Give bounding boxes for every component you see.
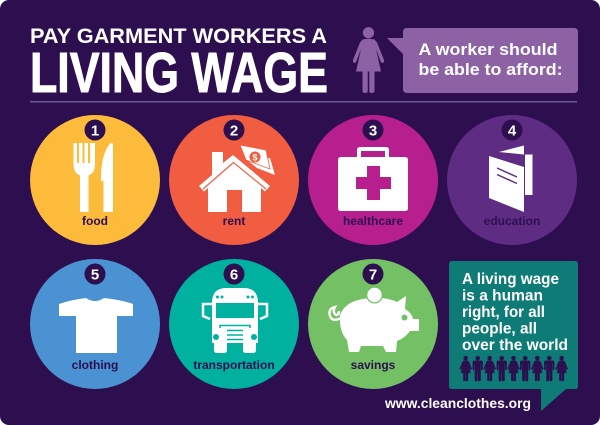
icon: first aid case: [338, 147, 408, 211]
item 6: transportation: 6: [230, 266, 238, 284]
speech bubble: a worker should be able to afford: [387, 28, 578, 93]
item 2: rent: rent: [223, 214, 245, 228]
item 4: education: [447, 115, 577, 245]
item 5: clothing: clothing: [72, 358, 118, 372]
icon: piggy bank with coin: [329, 286, 419, 352]
icon: open booklet: [489, 146, 532, 212]
icon: woman worker: [353, 27, 384, 93]
callout: a living wage is a human right: people, all: [462, 320, 537, 338]
title: [30, 25, 328, 105]
website url: www.cleanclothes.org: [384, 395, 531, 411]
item 7: savings: [308, 259, 438, 389]
icon: bus: [203, 288, 267, 353]
title: PAY GARMENT WORKERS A: [30, 25, 327, 48]
item 2: rent: [169, 115, 299, 245]
callout: a living wage is a human right: right, for all: [462, 304, 545, 321]
callout: a living wage is a human right: [449, 261, 578, 411]
icon: t-shirt: [59, 298, 133, 353]
item 5: clothing: [30, 259, 160, 389]
item 4: education: 4: [508, 122, 517, 140]
item 6: transportation: [169, 259, 299, 389]
icon row: nine people: [460, 356, 568, 381]
item 7: savings: 7: [369, 266, 377, 284]
item 3: healthcare: 3: [369, 122, 377, 140]
callout: a living wage is a human right: is a human: [462, 288, 543, 304]
speech bubble: a worker should be able to afford: be able to afford:: [418, 60, 562, 79]
item 6: transportation: transportation: [193, 358, 275, 372]
item 5: clothing: 5: [91, 266, 99, 284]
item 3: healthcare: healthcare: [343, 214, 403, 228]
item 1: food: food: [82, 214, 108, 228]
speech bubble: a worker should be able to afford: A worker should: [418, 40, 558, 59]
item 1: food: 1: [91, 122, 99, 140]
icon: house with money: $: [252, 152, 258, 162]
icon: fork and knife: [74, 143, 113, 212]
item 1: food: [30, 115, 160, 245]
callout: a living wage is a human right: A living wage: [462, 271, 559, 288]
title: LIVING WAGE: [30, 41, 328, 105]
item 2: rent: 2: [230, 122, 238, 140]
callout: a living wage is a human right: over the world: [462, 337, 568, 354]
item 7: savings: savings: [351, 358, 396, 372]
item 4: education: education: [484, 214, 540, 228]
item 3: healthcare: [308, 115, 438, 245]
